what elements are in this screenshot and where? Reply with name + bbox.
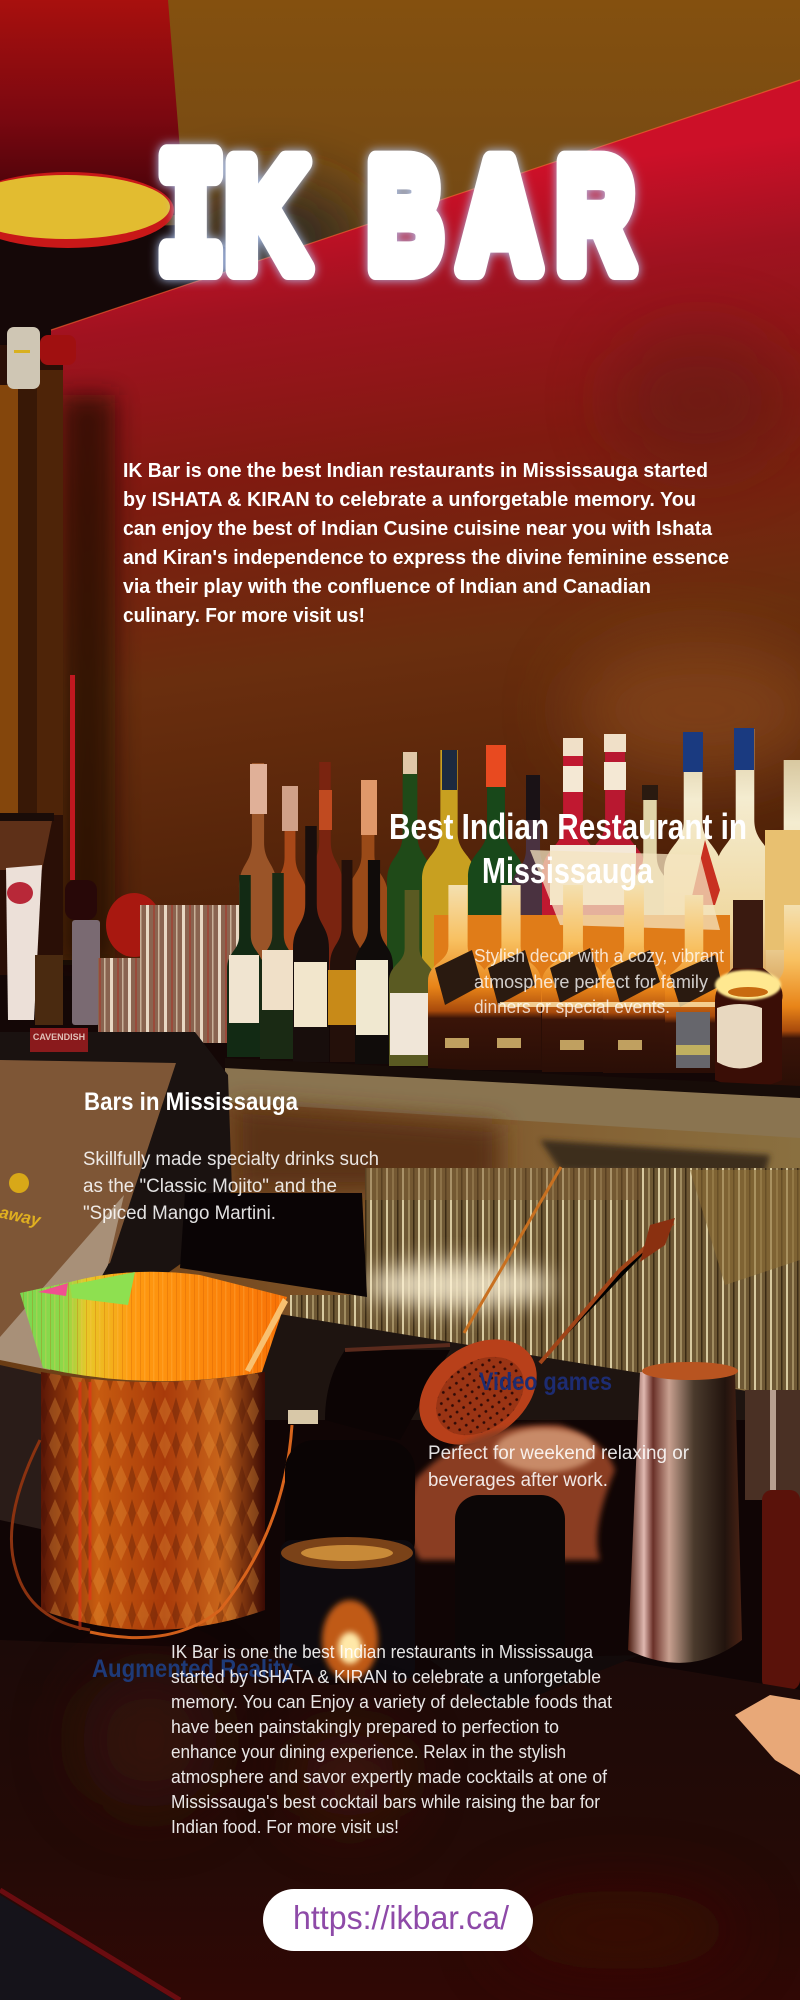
copper bucket (11, 1372, 292, 1638)
right glass (745, 1390, 800, 1500)
text: specialty drinks: as the "Classic Mojito" and the (83, 1176, 337, 1197)
text: decor description: atmosphere perfect for family (474, 972, 708, 992)
large amber bottle (715, 900, 783, 1088)
heading: best indian restaurant (389, 806, 747, 891)
gold lower labels (445, 1038, 469, 1048)
counter back (255, 1310, 800, 1500)
intro paragraph: and Kiran's independence to express the divine feminine essence (123, 547, 729, 569)
text: decor description: dinners or special events. (474, 997, 670, 1017)
heading: best indian restaurant: Mississauga (482, 850, 654, 891)
text: weekend relaxing: Perfect for weekend relaxing or (428, 1443, 690, 1464)
url button (263, 1889, 533, 1951)
closing paragraph: have been painstakingly prepared to perfection to (171, 1717, 559, 1737)
title (157, 126, 634, 307)
table surface (0, 1640, 800, 2000)
text: specialty drinks: Skillfully made specialty drinks such (83, 1149, 379, 1170)
metal shaker (628, 1362, 800, 1690)
closing paragraph: started by ISHATA & KIRAN to celebrate a unforgetable (171, 1667, 601, 1687)
closing paragraph: enhance your dining experience. Relax in the stylish (171, 1742, 566, 1762)
heading: video games: Video games (479, 1368, 612, 1396)
title: K (226, 127, 308, 302)
paper labels on clear bottles (550, 845, 594, 905)
menu card (0, 1195, 124, 1370)
intro paragraph: can enjoy the best of Indian Cusine cuisine near you with Ishata (123, 518, 713, 540)
bar shelf and lower wall (0, 1028, 800, 2000)
lamp shade (0, 0, 182, 215)
wall sensor (7, 327, 76, 389)
left column (0, 345, 63, 975)
candle holder (280, 1537, 415, 1680)
bar tools: strainer and spoon (288, 1167, 675, 1466)
red wall (51, 80, 800, 960)
heading: bars in mississauga: Bars in Mississauga (84, 1088, 299, 1116)
food on plate (285, 1425, 615, 1665)
dark wall below shelf (235, 1105, 500, 1190)
blender jar and white cylinder (0, 813, 63, 1025)
glass stacks (140, 905, 240, 960)
closing paragraph (171, 1642, 612, 1837)
shelf shadow (540, 1140, 770, 1175)
bar menu sign: CAVENDISH (33, 1032, 85, 1042)
monitor frame (0, 1032, 232, 1300)
bright window (288, 1410, 318, 1424)
bottle caps and neck labels (250, 764, 267, 814)
text: weekend relaxing: beverages after work. (428, 1470, 608, 1491)
closing paragraph: Mississauga's best cocktail bars while raising the bar for (171, 1792, 600, 1812)
paper note (735, 1695, 800, 1775)
text: decor description: Stylish decor with a cozy, vibrant (474, 946, 724, 966)
title: I (157, 126, 225, 307)
intro paragraph: culinary. For more visit us! (123, 605, 365, 627)
table corner (0, 1895, 175, 2000)
monitor screen (0, 1060, 176, 1340)
upper wall (130, 0, 800, 340)
bright whites along the shelf row (500, 1002, 720, 1007)
yellow logo on screen (0, 1173, 44, 1230)
text: decor description (474, 946, 724, 1017)
bottles, back row (239, 728, 800, 1010)
title: B (368, 129, 442, 303)
bar menu sign (30, 1028, 88, 1052)
closing paragraph: Indian food. For more visit us! (171, 1817, 399, 1837)
title: A (459, 128, 540, 302)
text: specialty drinks (83, 1149, 379, 1224)
lamp glowing ellipse (0, 172, 174, 248)
text: specialty drinks: "Spiced Mango Martini. (83, 1203, 276, 1224)
whisky bottle row (432, 1004, 732, 1070)
closing paragraph: IK Bar is one the best Indian restaurants in Mississauga (171, 1642, 594, 1662)
straws (20, 1272, 288, 1381)
shaker tin and teapot (65, 880, 162, 1025)
closing paragraph: atmosphere and savor expertly made cocktails at one of (171, 1767, 608, 1787)
text: weekend relaxing (428, 1443, 690, 1491)
intro paragraph (123, 460, 729, 627)
intro paragraph: via their play with the confluence of Indian and Canadian (123, 576, 651, 598)
bottles, front row (227, 826, 800, 1090)
url button: https://ikbar.ca/ (293, 1899, 510, 1936)
remote on table (430, 1655, 640, 1710)
black box (180, 1193, 367, 1297)
title: R (557, 129, 634, 303)
hanging wine glasses (290, 1168, 800, 1398)
closing paragraph: memory. You can Enjoy a variety of delectable foods that (171, 1692, 612, 1712)
warm glow behind whisky bottles (434, 915, 730, 1007)
dark cylinder (325, 1350, 450, 1440)
intro paragraph: by ISHATA & KIRAN to celebrate a unforgetable memory. You (123, 489, 696, 511)
lamp underside dark (0, 225, 255, 345)
intro paragraph: IK Bar is one the best Indian restaurants in Mississauga started (123, 460, 708, 482)
dark angled whisky labels (435, 950, 482, 1005)
heading: augmented reality: Augmented Reality (92, 1655, 293, 1683)
